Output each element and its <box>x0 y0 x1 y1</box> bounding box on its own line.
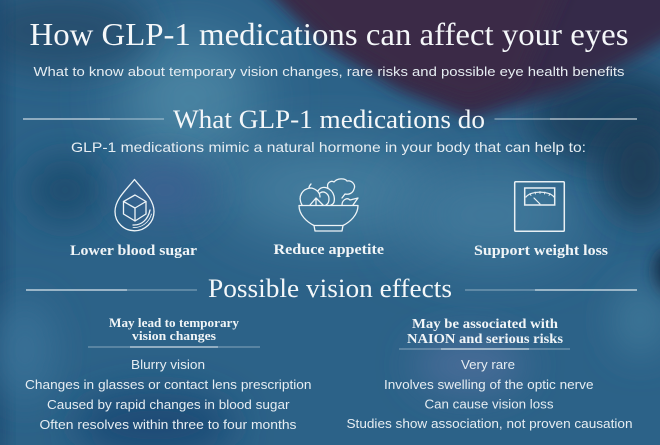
subtitle: What to know about temporary vision changes, rare risks and possible eye health benefits <box>34 64 625 79</box>
panel heading: vision changes <box>132 329 216 343</box>
list of temporary effects: Changes in glasses or contact lens prescription <box>25 377 312 392</box>
list of serious risks: Very rare <box>461 357 515 372</box>
benefit: reduce appetite <box>274 179 384 258</box>
panel heading: NAION and serious risks <box>407 331 563 346</box>
list of serious risks: Can cause vision loss <box>424 396 554 412</box>
label: Reduce appetite <box>274 242 384 258</box>
benefit: lower blood sugar <box>70 180 197 259</box>
icon: weight scale <box>515 182 564 231</box>
list of temporary effects: Caused by rapid changes in blood sugar <box>47 397 290 412</box>
list of temporary effects: Often resolves within three to four months <box>40 417 297 432</box>
panel: temporary vision changes <box>25 316 312 432</box>
icon: water drop with sugar cube <box>115 180 154 231</box>
list of temporary effects <box>25 357 312 432</box>
section: possible vision effects <box>25 274 637 432</box>
benefit: support weight loss <box>474 182 608 259</box>
panel heading: May lead to temporary <box>109 316 240 330</box>
heading: what GLP-1 medications do: What GLP-1 medications do <box>173 105 485 134</box>
heading: possible vision effects: Possible vision effects <box>208 274 452 303</box>
intro text: GLP-1 medications mimic a natural hormone in your body that can help to: <box>71 139 586 155</box>
list of serious risks: Involves swelling of the optic nerve <box>384 377 594 392</box>
list of temporary effects: Blurry vision <box>131 357 205 372</box>
list of serious risks <box>346 357 632 431</box>
icon: salad bowl <box>299 179 358 231</box>
panel heading: May be associated with <box>412 316 559 331</box>
title: How GLP-1 medications can affect your eyes <box>30 16 628 52</box>
label: Lower blood sugar <box>70 243 197 259</box>
section: what GLP-1 medications do <box>23 105 637 155</box>
list of serious risks: Studies show association, not proven causation <box>346 416 632 431</box>
label: Support weight loss <box>474 243 608 259</box>
panel: NAION and serious risks <box>346 316 632 431</box>
